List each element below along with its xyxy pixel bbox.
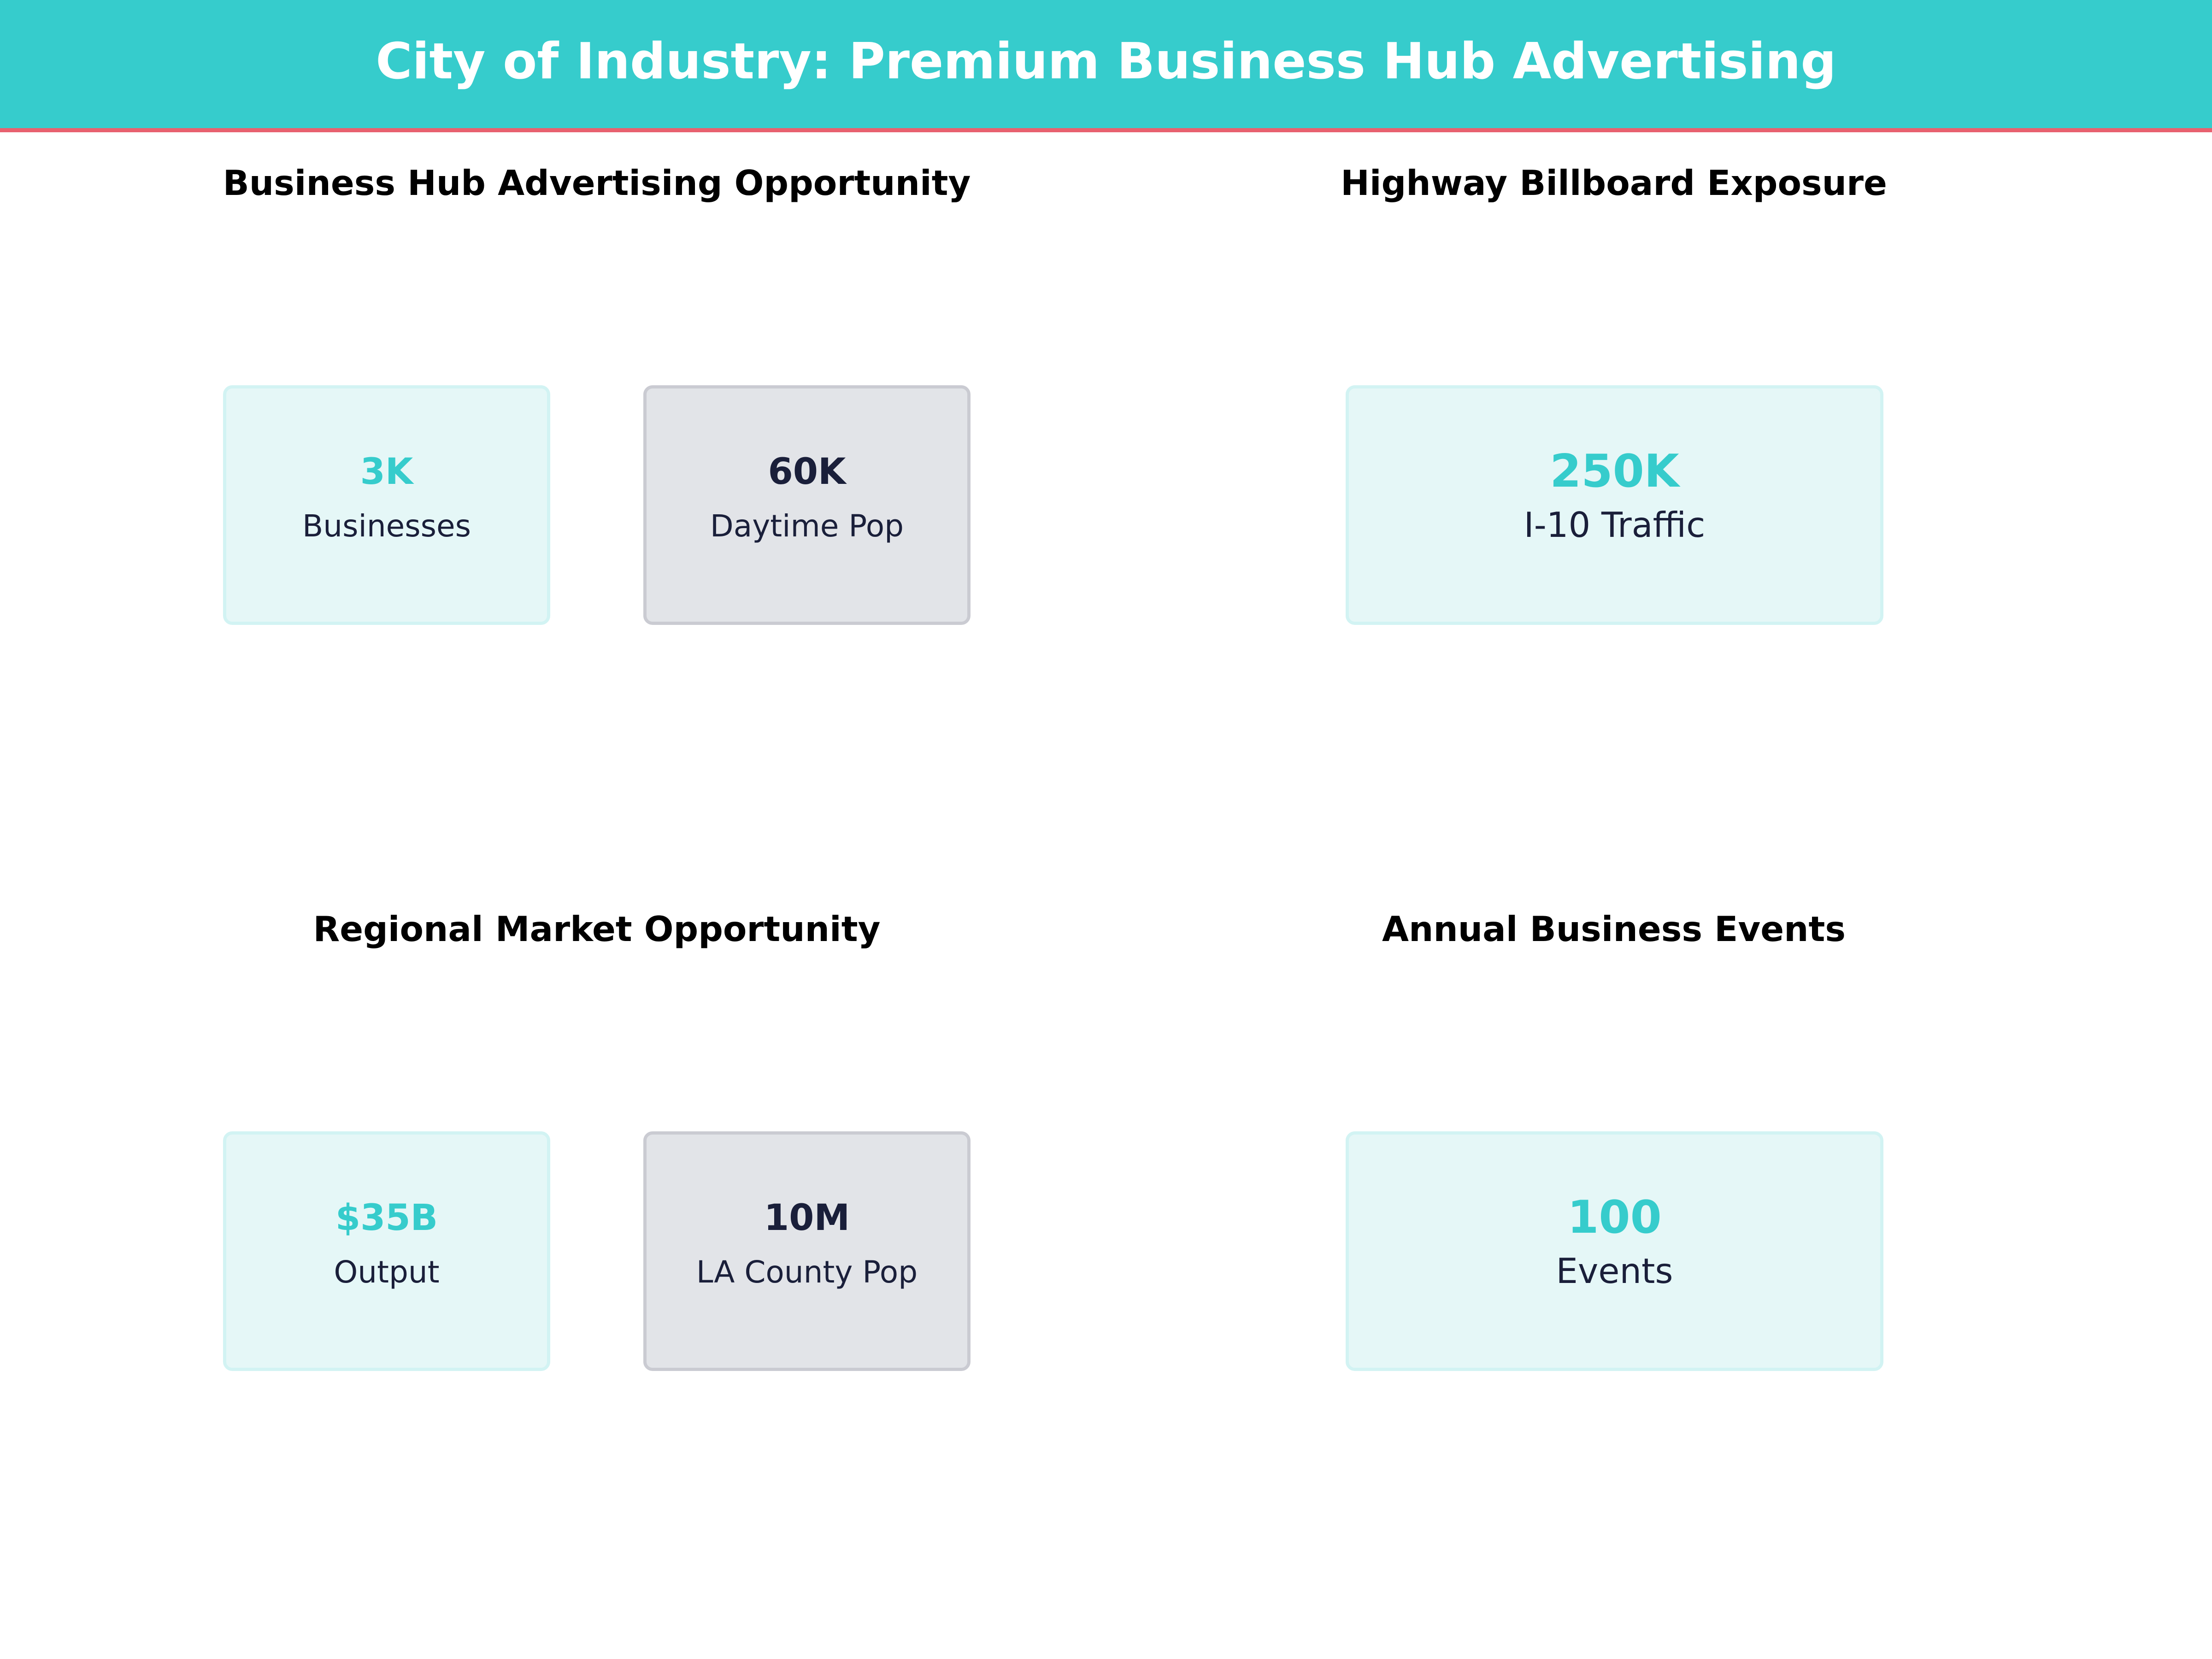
value: $35B — [335, 1197, 438, 1239]
value: 100 — [1567, 1191, 1662, 1244]
label: Daytime Pop — [710, 508, 904, 544]
value: 250K — [1550, 445, 1679, 498]
label: Businesses — [302, 508, 471, 544]
label: Events — [1556, 1251, 1673, 1291]
heading: events: Annual Business Events — [1382, 909, 1846, 949]
label: I-10 Traffic — [1524, 505, 1705, 545]
card: events — [1346, 1131, 1883, 1371]
value: 60K — [768, 451, 846, 493]
label: LA County Pop — [696, 1254, 918, 1290]
value: 10M — [764, 1197, 850, 1239]
title: City of Industry: Premium Business Hub Advertising — [376, 33, 1836, 90]
card: I-10 traffic — [1346, 385, 1883, 625]
heading: regional: Regional Market Opportunity — [313, 909, 881, 949]
card: LA county pop — [643, 1131, 971, 1371]
value: 3K — [360, 451, 413, 493]
card: businesses — [223, 385, 550, 625]
heading: business hub: Business Hub Advertising Opportunity — [223, 163, 971, 203]
header banner — [0, 0, 2212, 132]
card: output — [223, 1131, 550, 1371]
card: daytime pop — [643, 385, 971, 625]
heading: highway: Highway Billboard Exposure — [1341, 163, 1887, 203]
label: Output — [334, 1254, 440, 1290]
